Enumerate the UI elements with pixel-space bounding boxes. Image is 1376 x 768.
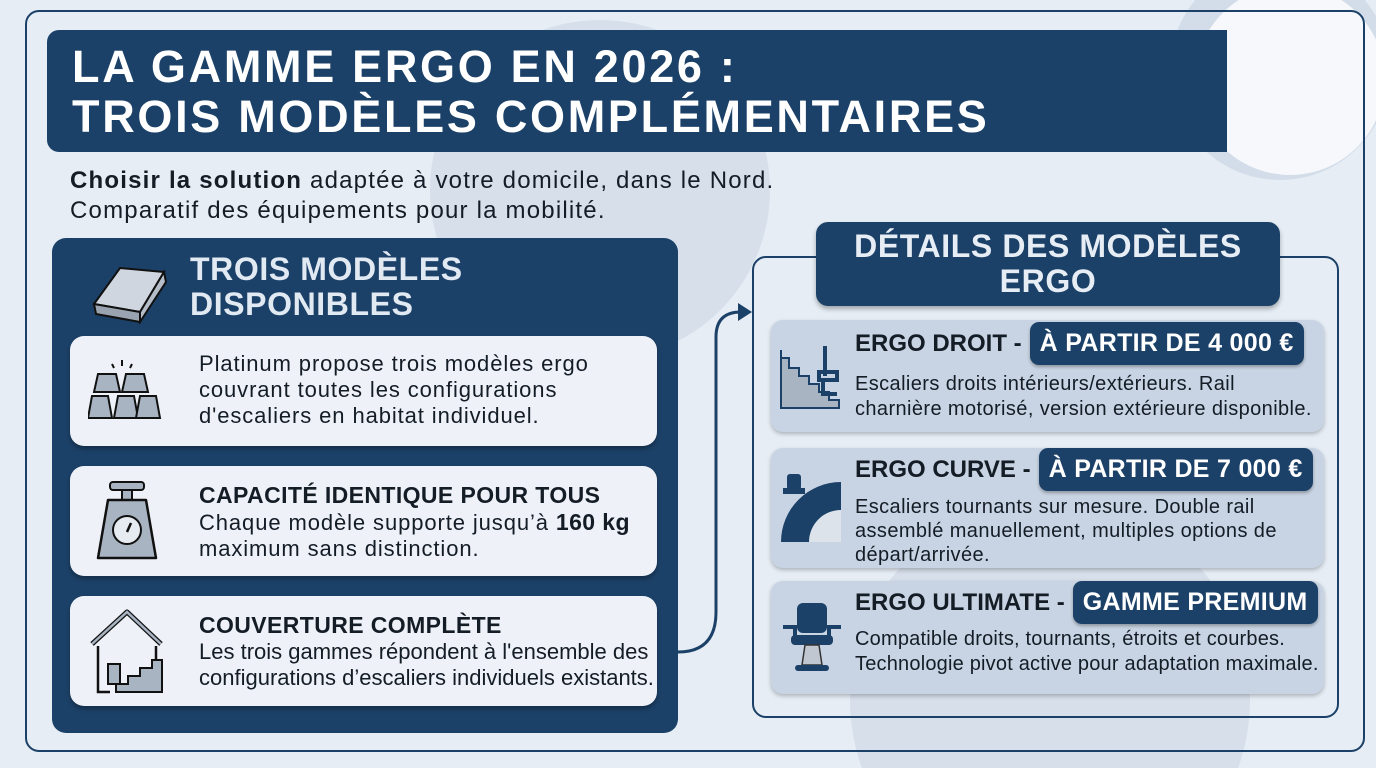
- card: ergo droit: [771, 320, 1324, 432]
- card: platinum: Platinum propose trois modèles ergo: [199, 351, 589, 376]
- arrow: connector: [678, 303, 752, 654]
- card: ergo curve: départ/arrivée.: [855, 544, 990, 566]
- subtitle: [70, 167, 774, 224]
- card: ergo ultimate: Technologie pivot active pour adaptation maximale.: [855, 653, 1319, 675]
- card: couverture: [70, 596, 657, 706]
- card: ergo droit: ERGO DROIT -: [855, 330, 1022, 356]
- card: capacité: CAPACITÉ IDENTIQUE POUR TOUS: [199, 482, 600, 508]
- panel heading: [190, 251, 463, 322]
- icon: curved stairlift: [781, 474, 841, 542]
- panel: trois modèles disponibles: [52, 238, 678, 733]
- icon: bars: [88, 360, 162, 419]
- card: couverture: COUVERTURE COMPLÈTE: [199, 612, 502, 638]
- card: capacité: [70, 466, 657, 576]
- card: ergo ultimate: [771, 581, 1324, 694]
- subtitle: Comparatif des équipements pour la mobilité.: [70, 197, 606, 224]
- title: LA GAMME ERGO EN 2026 :: [72, 41, 738, 92]
- title: [47, 30, 1227, 152]
- panel heading: DISPONIBLES: [190, 286, 414, 322]
- panel heading: détails: ERGO: [1000, 263, 1096, 299]
- card: ergo curve: assemblé manuellement, multiples options de: [855, 520, 1277, 542]
- card: ergo ultimate: Compatible droits, tournants, étroits et courbes.: [855, 628, 1285, 650]
- panel heading: détails: [816, 222, 1280, 306]
- panel: détails des modèles: [752, 256, 1339, 718]
- card: platinum: [70, 336, 657, 446]
- card: ergo droit: À PARTIR DE 4 000 €: [1040, 329, 1294, 357]
- icon: chair: [783, 603, 841, 671]
- card: couverture: configurations d’escaliers individuels existants.: [199, 665, 654, 690]
- card: ergo droit: Escaliers droits intérieurs/extérieurs. Rail: [855, 373, 1235, 395]
- subtitle: Choisir la solution adaptée à votre domicile, dans le Nord.: [70, 167, 774, 194]
- icon: scale: [96, 481, 158, 560]
- icon: house stairs: [90, 609, 163, 694]
- card: couverture: Les trois gammes répondent à l'ensemble des: [199, 639, 648, 664]
- panel heading: détails: DÉTAILS DES MODÈLES: [854, 228, 1242, 264]
- card: ergo ultimate: ERGO ULTIMATE -: [855, 588, 1065, 616]
- card: ergo curve: À PARTIR DE 7 000 €: [1049, 455, 1303, 483]
- title: TROIS MODÈLES COMPLÉMENTAIRES: [72, 91, 990, 142]
- icon: straight stairlift: [780, 346, 840, 409]
- panel heading: TROIS MODÈLES: [190, 251, 463, 287]
- card: ergo curve: Escaliers tournants sur mesure. Double rail: [855, 496, 1255, 518]
- card: capacité: maximum sans distinction.: [199, 536, 479, 561]
- icon: ingot: [92, 267, 167, 324]
- card: ergo curve: ERGO CURVE -: [855, 456, 1031, 482]
- card: platinum: d'escaliers en habitat individuel.: [199, 403, 540, 428]
- card: ergo ultimate: GAMME PREMIUM: [1083, 588, 1308, 616]
- card: platinum: couvrant toutes les configurations: [199, 377, 557, 402]
- card: capacité: Chaque modèle supporte jusqu’à 160 kg: [199, 509, 630, 535]
- card: ergo droit: charnière motorisé, version extérieure disponible.: [855, 398, 1312, 420]
- card: ergo curve: [771, 448, 1324, 568]
